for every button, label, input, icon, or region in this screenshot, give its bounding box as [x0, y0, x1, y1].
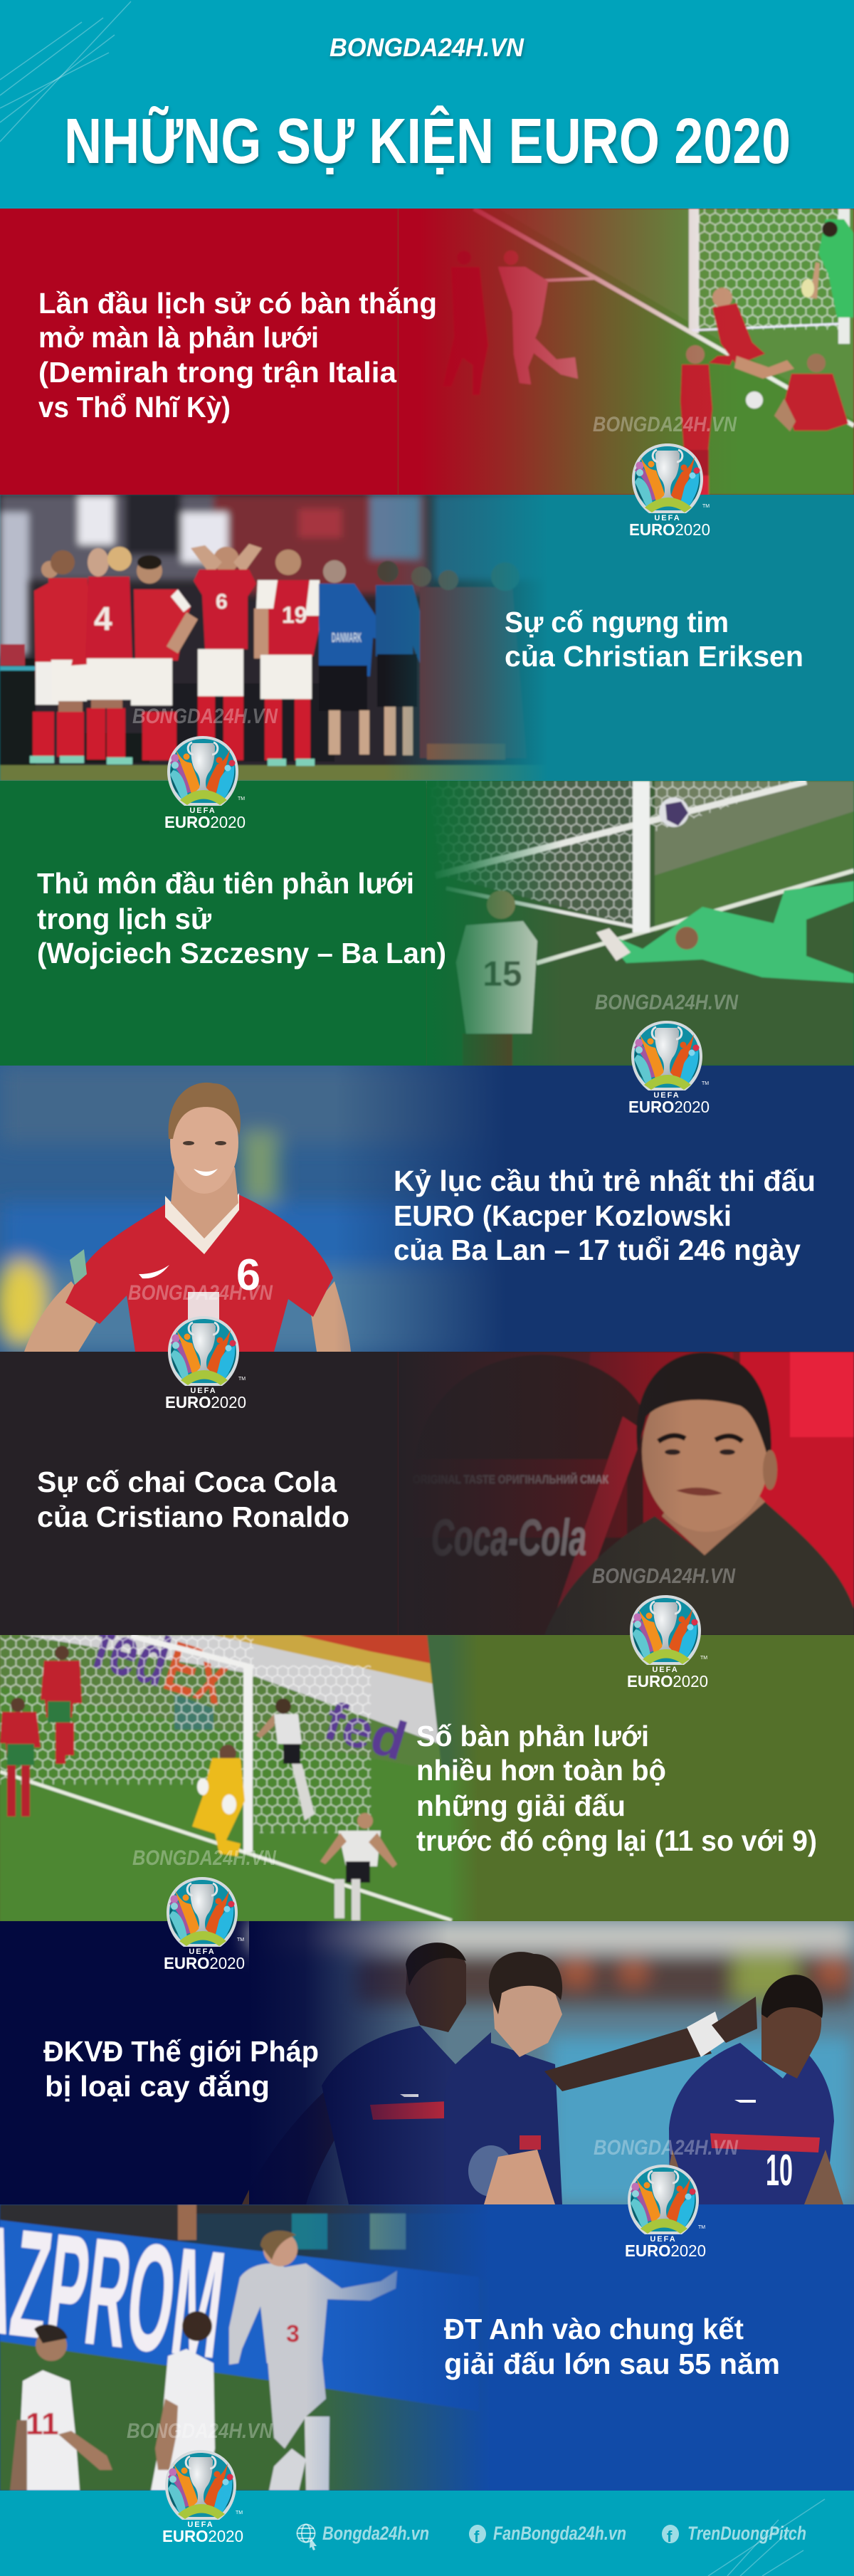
navy gradient overlay	[342, 1066, 538, 1352]
text block: own goal count: những giải đấu	[416, 1789, 626, 1822]
logo: UEFA Euro 2020 badge, panel 2: UEFA	[189, 806, 216, 815]
photo: France players dejected	[242, 1921, 854, 2207]
logo: UEFA Euro 2020 badge, panel 5	[627, 1595, 708, 1691]
text block: England final: ĐT Anh vào chung kết	[444, 2313, 744, 2345]
text block: goalkeeper own goal: Thủ môn đầu tiên phản lưới	[37, 867, 414, 900]
green gradient overlay	[427, 781, 557, 1066]
panel: England final	[0, 2192, 854, 2491]
icon: facebook: f	[667, 2528, 673, 2545]
logo: UEFA Euro 2020 badge, panel 6: EURO2020	[164, 1954, 245, 1972]
text block: youngest player: của Ba Lan – 17 tuổi 246 ngày	[394, 1234, 801, 1266]
logo: UEFA Euro 2020 badge, panel 1: TM	[702, 504, 710, 509]
watermark: BONGDA24H.VN	[593, 413, 737, 436]
logo: UEFA Euro 2020 badge, panel 4	[165, 1316, 246, 1411]
logo: UEFA Euro 2020 badge, panel 7	[625, 2165, 706, 2260]
text block: Eriksen: Sự cố ngưng tim	[505, 606, 729, 638]
text block: goalkeeper own goal: (Wojciech Szczesny – Ba Lan)	[37, 937, 446, 969]
olive gradient overlay	[0, 1635, 854, 1921]
text block: France eliminated	[43, 2035, 319, 2103]
photo: Ronaldo with Coca Cola bottle	[399, 1352, 854, 1635]
photo: Denmark players forming a circle: 6	[216, 590, 228, 614]
photo: Ronaldo with Coca Cola bottle: ORIGINAL TASTE ОРИГІНАЛЬНИЙ СМАК	[413, 1473, 609, 1486]
logo: UEFA Euro 2020 badge, panel 8: EURO2020	[162, 2527, 243, 2545]
watermark: BONGDA24H.VN	[132, 1846, 277, 1870]
text block: Coca Cola: của Cristiano Ronaldo	[37, 1500, 349, 1533]
watermark: BONGDA24H.VN	[594, 2136, 739, 2160]
text block: Coca Cola: Sự cố chai Coca Cola	[37, 1466, 337, 1498]
photo: Szczesny own goal: 15	[483, 954, 522, 994]
logo: UEFA Euro 2020 badge, panel 4: TM	[238, 1377, 246, 1382]
panel: opening own goal	[0, 209, 854, 497]
text block: opening own goal: Lần đầu lịch sử có bàn thắng	[38, 287, 437, 320]
icon: facebook	[662, 2525, 679, 2545]
photo: Denmark players forming a circle: DANMARK	[332, 631, 362, 645]
logo: UEFA Euro 2020 badge, panel 7: UEFA	[650, 2235, 677, 2244]
text block: France eliminated: bị loại cay đắng	[45, 2070, 270, 2103]
text block: goalkeeper own goal: trong lịch sử	[37, 903, 211, 935]
text block: youngest player: Kỷ lục cầu thủ trẻ nhất thi đấu	[394, 1165, 816, 1197]
watermark: BONGDA24H.VN	[132, 705, 278, 728]
logo: UEFA Euro 2020 badge, panel 8: UEFA	[187, 2520, 214, 2529]
photo: Denmark players forming a circle	[0, 495, 555, 781]
watermark: BONGDA24H.VN	[127, 2419, 273, 2443]
panel: France eliminated	[0, 1921, 854, 2207]
text block: own goal count: trước đó cộng lại (11 so với 9)	[416, 1824, 817, 1857]
logo: UEFA Euro 2020 badge, panel 3: TM	[702, 1081, 709, 1086]
photo: Portugal vs Germany goal: fedEx	[85, 1604, 237, 1720]
photo: Kacper Kozlowski: 6	[236, 1251, 260, 1300]
logo: UEFA Euro 2020 badge, panel 5: EURO2020	[627, 1672, 708, 1691]
logo: UEFA Euro 2020 badge, panel 3	[628, 1021, 710, 1116]
teal gradient overlay	[392, 495, 558, 781]
text block: opening own goal: mở màn là phản lưới	[38, 321, 319, 354]
panel: own goal count	[0, 1604, 854, 1921]
logo: UEFA Euro 2020 badge, panel 5: UEFA	[652, 1666, 679, 1674]
photo: France players dejected: 10	[766, 2146, 793, 2195]
photo: England players celebrating: 3	[286, 2320, 300, 2348]
photo: Portugal vs Germany goal	[0, 1604, 484, 1921]
text block: own goal count: Số bàn phản lưới	[416, 1720, 649, 1752]
photo: England players celebrating	[0, 2192, 498, 2491]
logo: UEFA Euro 2020 badge, panel 8: TM	[236, 2511, 243, 2515]
logo: UEFA Euro 2020 badge, panel 5: TM	[700, 1656, 707, 1661]
text block: youngest player	[394, 1165, 816, 1266]
photo: Kacper Kozlowski	[0, 1066, 527, 1352]
red gradient overlay	[399, 209, 710, 495]
icon: facebook: f	[474, 2528, 480, 2545]
text block: opening own goal: (Demirah trong trận Italia	[38, 356, 397, 389]
icon: globe	[297, 2524, 317, 2550]
logo: UEFA Euro 2020 badge, panel 3: EURO2020	[628, 1098, 710, 1116]
blue gradient overlay	[0, 2204, 854, 2491]
logo: UEFA Euro 2020 badge, panel 6	[164, 1877, 245, 1972]
text block: own goal count: nhiều hơn toàn bộ	[416, 1754, 666, 1787]
text block: France eliminated: ĐKVĐ Thế giới Pháp	[43, 2035, 319, 2068]
photo: England players celebrating: 11	[26, 2407, 59, 2441]
text block: England final: giải đấu lớn sau 55 năm	[444, 2348, 780, 2380]
text block: youngest player: EURO (Kacper Kozlowski	[394, 1199, 732, 1232]
logo: UEFA Euro 2020 badge, panel 2: EURO2020	[164, 813, 246, 831]
text block: Eriksen: của Christian Eriksen	[505, 640, 803, 673]
watermark: BONGDA24H.VN	[128, 1281, 273, 1305]
logo: UEFA Euro 2020 badge, panel 6: UEFA	[189, 1947, 216, 1956]
text block: England final	[444, 2313, 780, 2380]
header background	[0, 0, 854, 209]
panel: Coca Cola	[0, 1352, 854, 1635]
panel: youngest player	[0, 1066, 854, 1352]
footer: website link	[297, 2523, 429, 2550]
logo: UEFA Euro 2020 badge, panel 8	[162, 2450, 243, 2545]
footer: fanpage link: FanBongda24h.vn	[493, 2523, 626, 2544]
dark gradient overlay	[399, 1352, 668, 1635]
footer: pitch page link: TrenDuongPitch	[687, 2523, 806, 2544]
footer background	[0, 2491, 854, 2576]
photo: Turkey players after own goal	[399, 209, 854, 497]
logo: UEFA Euro 2020 badge, panel 7: EURO2020	[625, 2241, 706, 2260]
logo: UEFA Euro 2020 badge, panel 7: TM	[698, 2225, 705, 2230]
logo: UEFA Euro 2020 badge, panel 6: TM	[237, 1938, 244, 1942]
logo: UEFA Euro 2020 badge, panel 3: UEFA	[653, 1091, 680, 1100]
text block: Eriksen	[505, 609, 801, 666]
logo: UEFA Euro 2020 badge, panel 2: TM	[238, 797, 245, 801]
logo: UEFA Euro 2020 badge, panel 2	[164, 736, 246, 831]
text block: Coca Cola	[38, 1469, 349, 1528]
logo: UEFA Euro 2020 badge, panel 1	[629, 443, 710, 539]
panel: goalkeeper own goal	[0, 781, 854, 1069]
logo: UEFA Euro 2020 badge, panel 1: UEFA	[654, 514, 681, 522]
panel: Eriksen	[0, 495, 854, 781]
footer: pitch page link	[662, 2523, 806, 2545]
text block: opening own goal: vs Thổ Nhĩ Kỳ)	[38, 391, 231, 424]
footer: fanpage link	[469, 2523, 626, 2545]
photo: Szczesny own goal	[427, 781, 854, 1069]
footer: website link: Bongda24h.vn	[322, 2523, 429, 2544]
watermark: BONGDA24H.VN	[592, 1565, 736, 1588]
logo: UEFA Euro 2020 badge, panel 4: EURO2020	[165, 1393, 246, 1411]
photo: Portugal vs Germany goal: fed	[317, 1691, 413, 1772]
icon: facebook	[469, 2525, 486, 2545]
watermark: BONGDA24H.VN	[595, 991, 739, 1014]
text block: own goal count	[416, 1720, 817, 1857]
deep navy gradient overlay	[249, 1921, 854, 2204]
photo: Denmark players forming a circle: 19	[282, 602, 307, 628]
photo: Ronaldo with Coca Cola bottle: Coca-Cola	[431, 1510, 586, 1567]
text block: goalkeeper own goal	[37, 867, 446, 969]
text block: opening own goal	[38, 287, 437, 424]
logo: UEFA Euro 2020 badge, panel 4: UEFA	[190, 1387, 217, 1395]
photo: Denmark players forming a circle: 4	[94, 600, 112, 637]
brand logo: BONGDA24H.VN	[330, 33, 524, 62]
logo: UEFA Euro 2020 badge, panel 1: EURO2020	[629, 520, 710, 539]
